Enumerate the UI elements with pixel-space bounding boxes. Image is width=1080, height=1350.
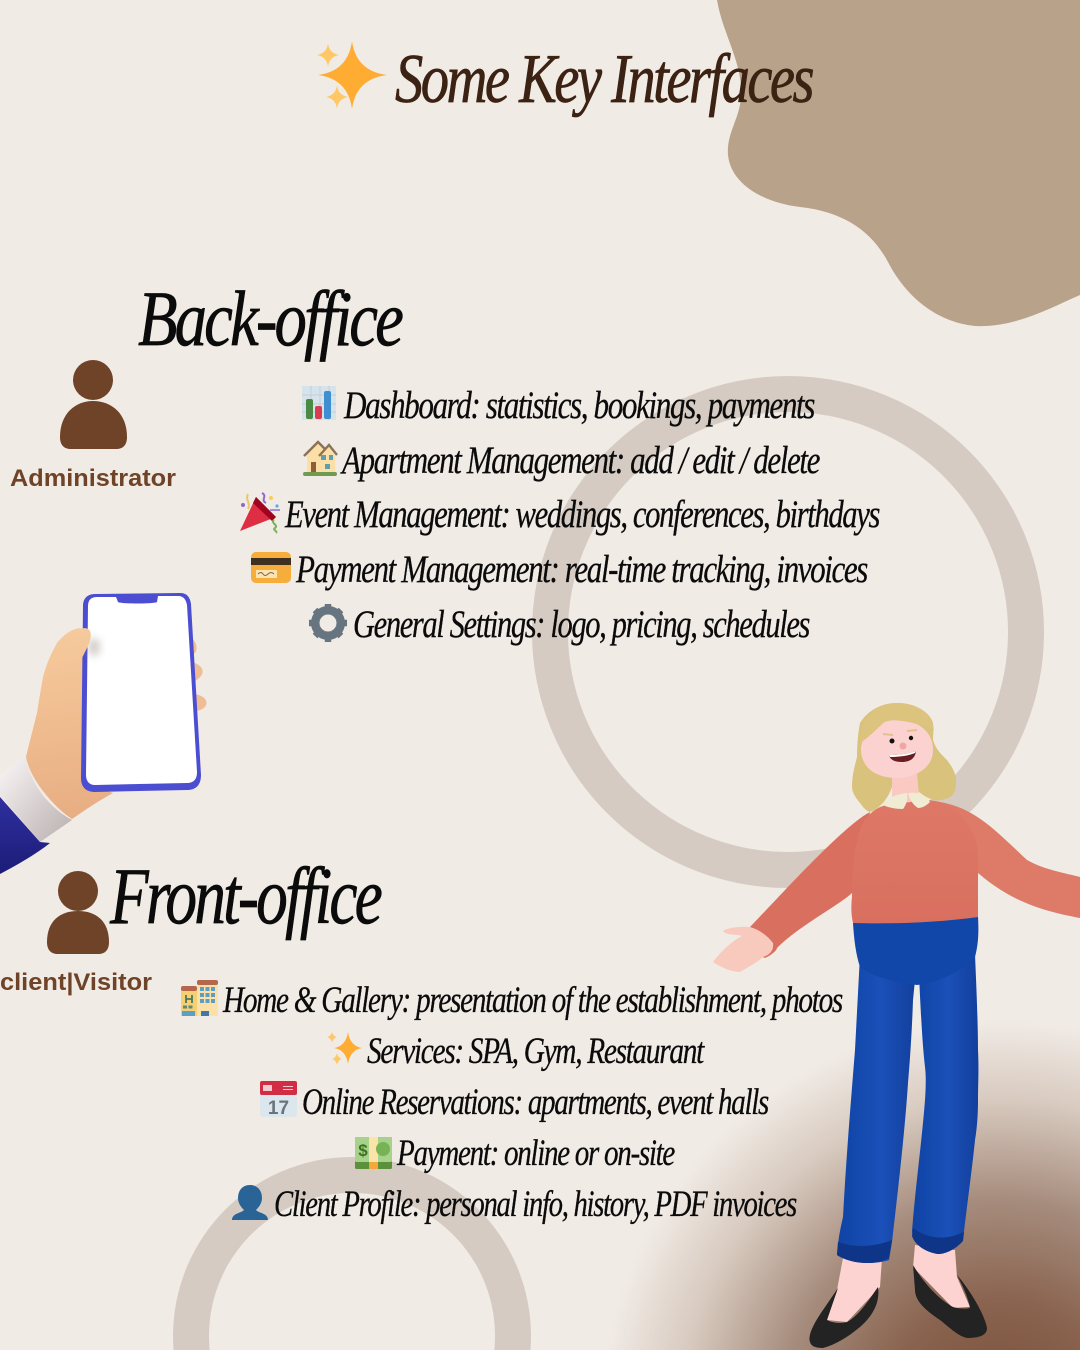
- item: payment management: Payment Management: real-time tracking, invoices: [295, 548, 867, 591]
- ankles: [827, 1245, 970, 1322]
- right eyebrow: [907, 730, 917, 731]
- icon: calendar: 17: [268, 1098, 289, 1119]
- item: general settings: General Settings: logo, pricing, schedules: [353, 603, 809, 646]
- item: dashboard: Dashboard: statistics, bookings, payments: [343, 384, 814, 427]
- icon: sparkles: [327, 1032, 362, 1065]
- heading: Back-office: Back-office: [138, 275, 403, 362]
- item: online reservations: Online Reservations: apartments, event halls: [302, 1082, 769, 1123]
- illustration: hand holding phone: [0, 593, 206, 874]
- icon: client person: [47, 871, 109, 954]
- fingers: [190, 638, 206, 711]
- label: client|Visitor: client|Visitor: [0, 969, 152, 996]
- icon: credit card: [251, 552, 291, 583]
- icon: party popper: [240, 493, 280, 533]
- teeth: [889, 751, 916, 757]
- item: client profile: Client Profile: personal info, history, PDF invoices: [274, 1184, 797, 1225]
- hair: [852, 703, 956, 812]
- nose: [900, 742, 906, 750]
- label: Administrator: Administrator: [10, 465, 176, 492]
- icon: bar chart: [302, 386, 336, 420]
- icon: gear: [309, 604, 347, 642]
- neck: [892, 772, 919, 802]
- sweater torso: [851, 800, 978, 923]
- front-office list: [181, 980, 843, 1225]
- right arm: [940, 802, 1080, 918]
- item: payment: Payment: online or on-site: [396, 1133, 675, 1174]
- icon: administrator person: [60, 360, 127, 449]
- waist: [853, 917, 978, 985]
- item: services: Services: SPA, Gym, Restaurant: [367, 1031, 706, 1072]
- top-right blob: [717, 0, 1080, 326]
- icon: title sparkles: [317, 41, 387, 109]
- palm: [26, 628, 113, 819]
- left arm and cuff: [750, 812, 870, 958]
- left hand: [713, 927, 773, 972]
- icon: banknote: $: [358, 1141, 368, 1160]
- phone body: [81, 593, 201, 792]
- item: home and gallery: Home & Gallery: presentation of the establishment, photos: [222, 980, 843, 1021]
- title: [317, 41, 814, 118]
- left eyebrow: [883, 734, 893, 735]
- sleeve: [0, 797, 50, 874]
- hair fringe: [860, 703, 934, 743]
- item: event management: Event Management: weddings, conferences, birthdays: [284, 493, 879, 536]
- bottom-right brown gradient: [590, 1010, 1080, 1350]
- collar: [883, 793, 930, 809]
- left eye: [890, 738, 894, 744]
- thumb shadow: [88, 638, 100, 656]
- large ring: [550, 394, 1026, 870]
- right trouser leg: [912, 955, 978, 1254]
- illustration: woman: [713, 703, 1080, 1348]
- left trouser leg: [837, 955, 917, 1263]
- phone screen: [86, 596, 197, 785]
- icon: hotel: [181, 980, 218, 1016]
- left shoe: [810, 1287, 878, 1348]
- thumb: [70, 628, 91, 680]
- title text: Some Key Interfaces: [395, 41, 814, 118]
- right shoe: [913, 1265, 987, 1338]
- face: [861, 720, 933, 778]
- item: apartment management: Apartment Management: add / edit / delete: [340, 439, 820, 482]
- back-office list: [240, 384, 879, 646]
- mouth: [889, 751, 916, 762]
- shirt cuff: [0, 755, 72, 842]
- heading: Front-office: Front-office: [109, 853, 382, 941]
- icon: house: [303, 442, 337, 476]
- icon: calendar: [260, 1081, 297, 1119]
- trouser cuffs: [837, 1228, 964, 1263]
- icon: client silhouette: [232, 1185, 268, 1220]
- right eye: [909, 736, 913, 740]
- icon: banknote: [355, 1137, 392, 1169]
- bottom ring: [173, 1157, 531, 1350]
